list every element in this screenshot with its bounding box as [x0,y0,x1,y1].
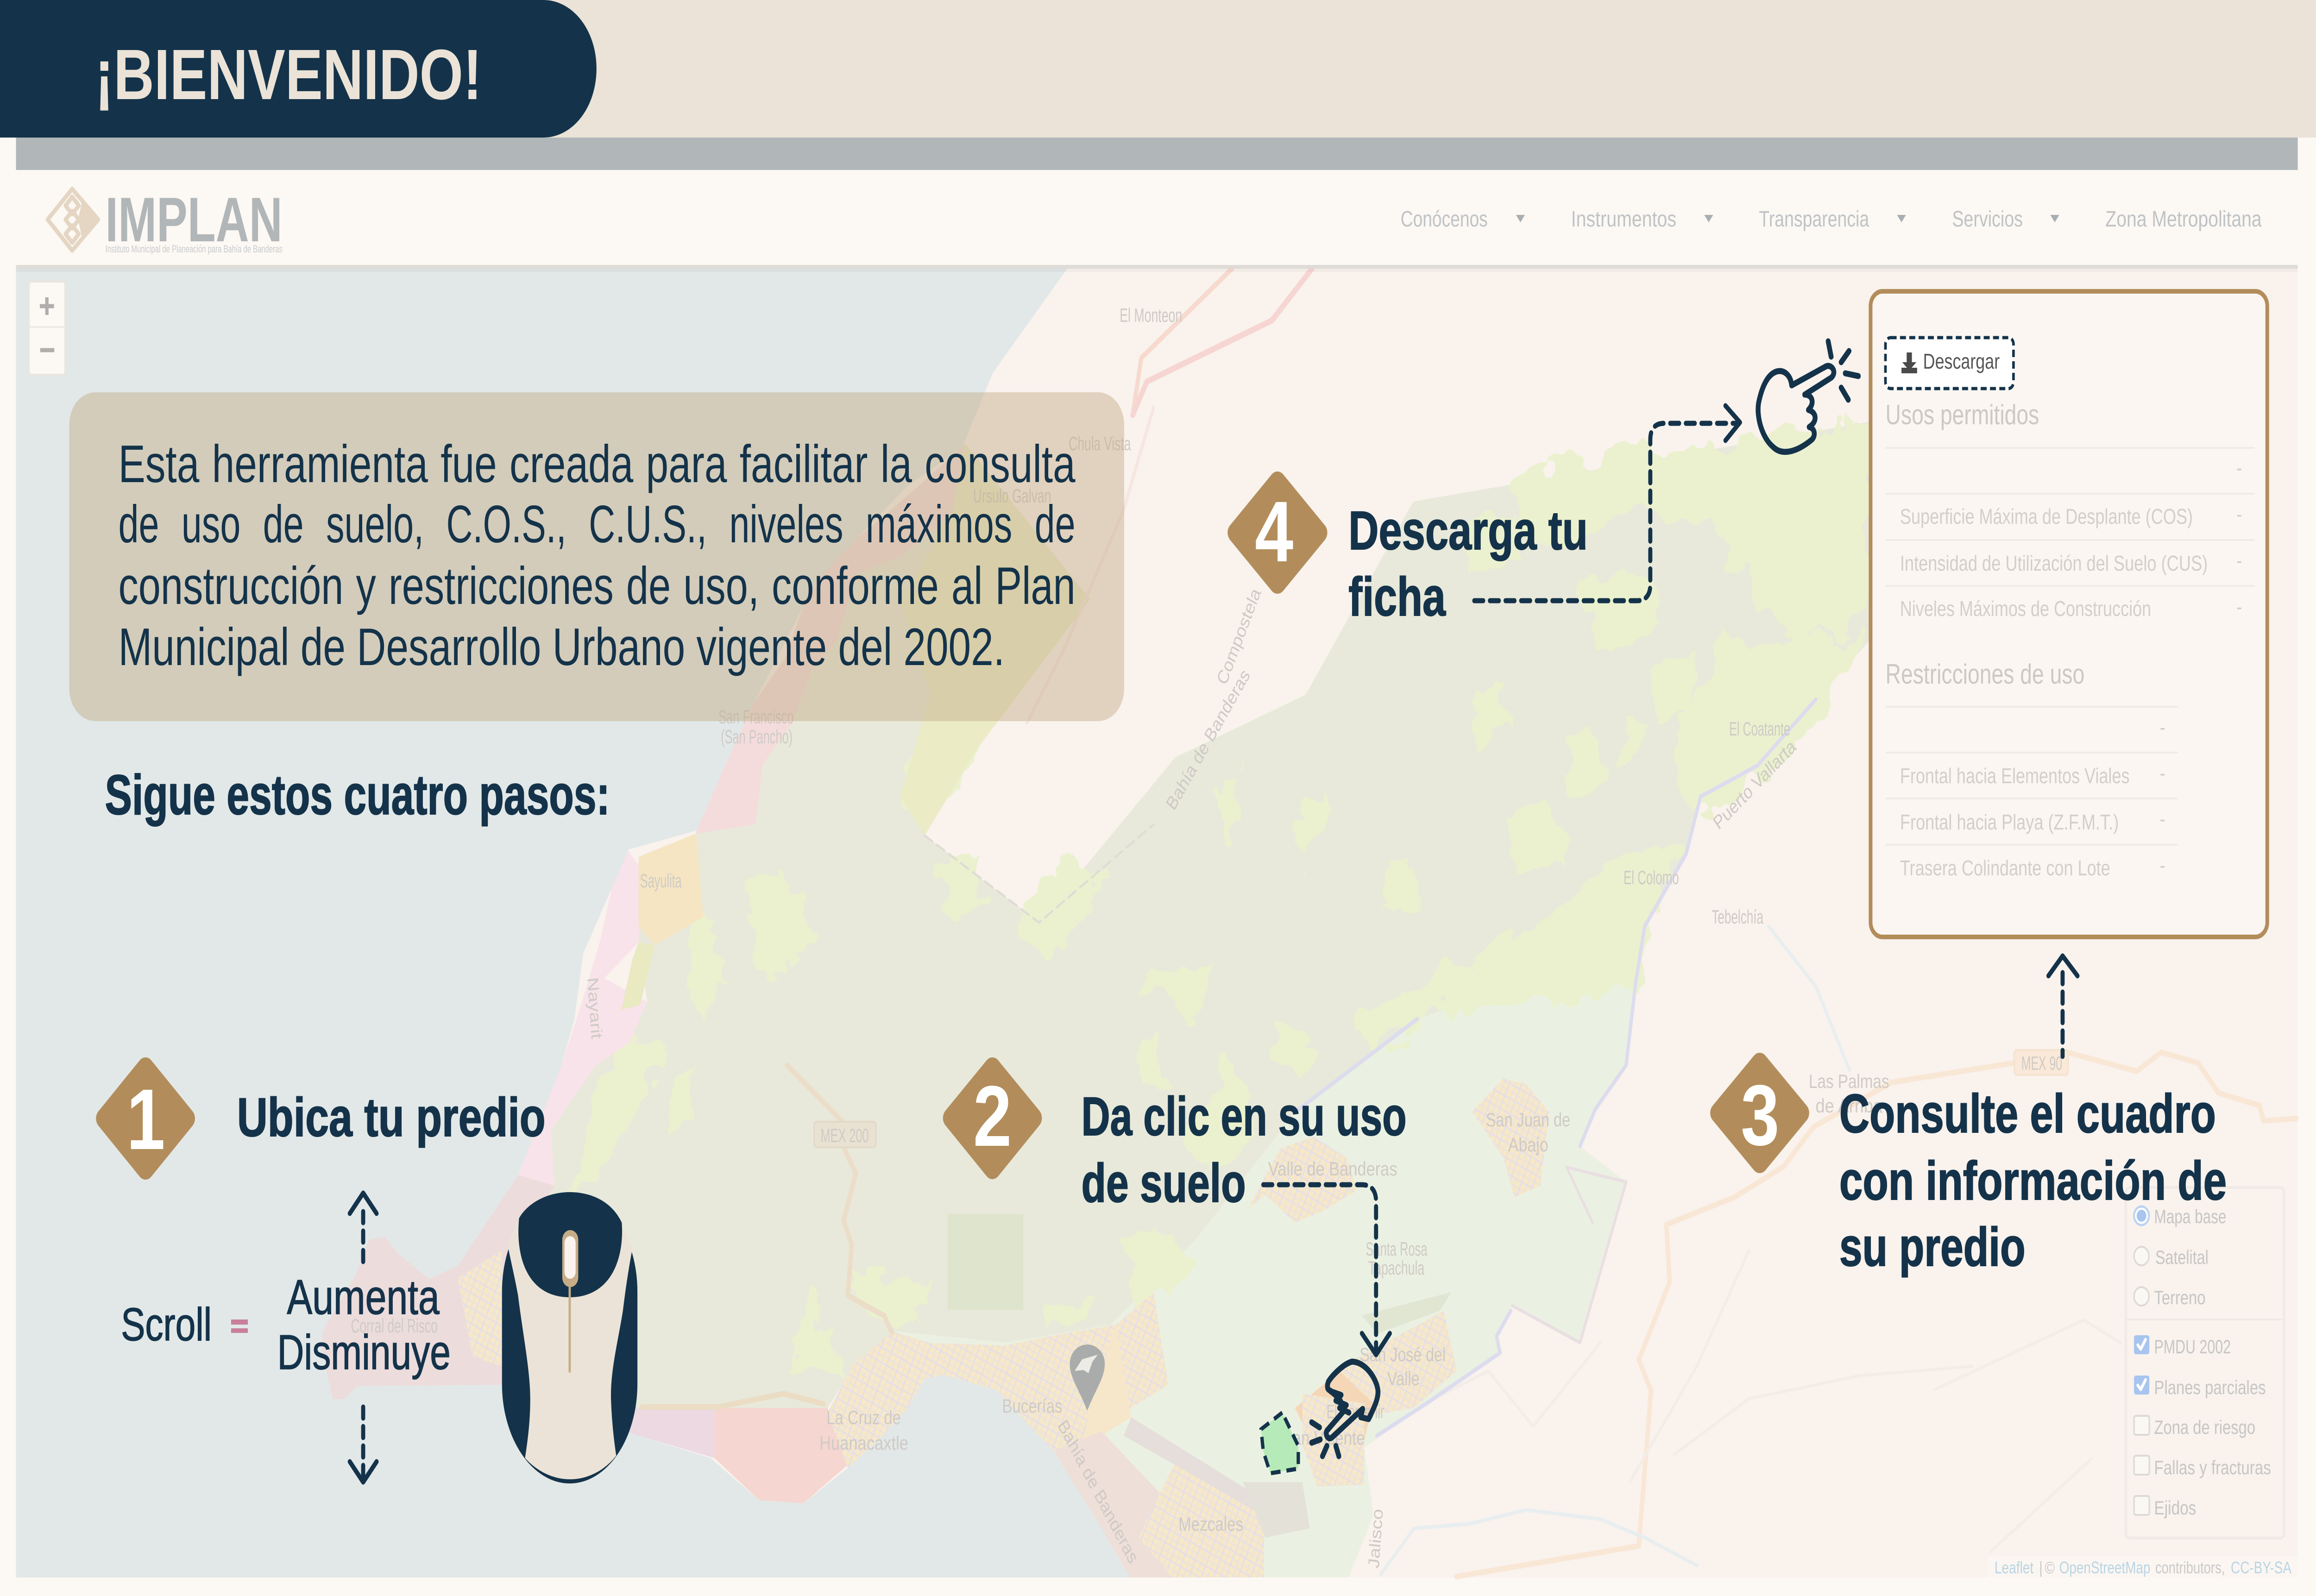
nav menu: Zona Metropolitana [2105,207,2262,232]
layer control: Planes parciales [2154,1377,2266,1399]
step 3 heading: Consulte el cuadro [1839,1083,2216,1144]
step 2 heading [1082,1086,1407,1213]
nav menu [1401,207,2262,232]
intro text: Municipal de Desarrollo Urbano vigente del 2002. [118,617,1005,676]
uses section: Niveles Máximos de Construcción [1900,597,2151,621]
step 3 heading: con información de [1839,1150,2227,1211]
step 3 arrow [2048,956,2077,1056]
towns [1248,1137,1357,1223]
title: ¡BIENVENIDO! [95,35,482,114]
zoom control [29,281,65,375]
water [16,269,1130,1577]
layer control [2126,1188,2284,1538]
step 1 badge [104,1068,187,1169]
map place labels: Chula Vista [1069,434,1131,455]
step 4 arrow [1474,406,1740,601]
arrow up [350,1193,377,1269]
map place labels: La Cruz de [826,1407,901,1429]
map place labels: Valle de Banderas [1268,1159,1397,1180]
map place labels: Ursulo Galvan [973,486,1051,507]
layer control: PMDU 2002 [2154,1337,2231,1358]
pale rectangle parcel [947,1214,1023,1310]
restrictions section: Frontal hacia Elementos Viales [1900,764,2130,788]
attribution: CC-BY-SA [2231,1558,2291,1577]
road sign MEX 90 [2014,1050,2068,1075]
gray band [16,138,2298,170]
map place labels: Compostela [1214,584,1265,688]
map place labels: (San Pancho) [721,727,793,748]
road sign MEX 200 [814,1122,876,1147]
uses section: Superficie Máxima de Desplante (COS) [1900,504,2193,528]
restrictions section: - [2160,853,2165,877]
step 1 heading: Ubica tu predio [237,1087,546,1148]
layer control: Ejidos [2154,1498,2196,1519]
map place labels: Nayarit [584,977,605,1040]
map place labels: Tapachula [1368,1258,1425,1279]
south urban strip [714,1408,848,1503]
step 4 badge [1236,482,1319,584]
step 2 heading: Da clic en su uso [1082,1086,1407,1147]
step 2 badge: 2 [973,1068,1012,1164]
map place labels: Corral del Risco [351,1316,438,1337]
restrictions section: - [2160,761,2165,785]
download button: Descargar [1923,349,2000,373]
step 2 [951,1068,1407,1473]
map place labels: San Juan de [1486,1110,1570,1131]
top banner [0,0,2316,138]
uses section [1886,399,2254,621]
logo: IMPLAN [105,185,283,255]
map place labels: El Colomo [1624,867,1679,889]
subheading: Sigue estos cuatro pasos: [105,764,610,826]
uses section: - [2236,502,2242,526]
restrictions section: Frontal hacia Playa (Z.F.M.T.) [1900,810,2119,834]
map place labels: Mezcales [1178,1514,1243,1535]
step 1 badge: 1 [126,1071,165,1168]
map place labels: San Francisco [718,707,794,728]
step 4 heading: Descarga tu [1348,500,1588,561]
restrictions section: - [2160,715,2165,739]
download button [1886,338,2014,389]
map place labels: Huanacaxtle [819,1433,908,1454]
step 4 [1236,341,1858,627]
step 2 badge [951,1068,1034,1169]
intro text box [69,392,1124,721]
attribution: © [2045,1558,2055,1577]
restrictions section: - [2160,807,2165,831]
restrictions section: Trasera Colindante con Lote [1900,856,2110,880]
intro text: Esta herramienta fue creada para facilitar la consulta [118,434,1076,493]
attribution: | [2039,1558,2043,1577]
step 3 badge [1718,1063,1801,1163]
map place labels: San José del [1359,1345,1446,1366]
map place labels: Las Palmas [1809,1071,1889,1093]
step 1 [104,1068,637,1483]
attribution: contributors, [2155,1558,2225,1577]
step 4 badge: 4 [1255,483,1293,580]
map place labels: Santa Rosa [1366,1239,1428,1260]
logo: Instituto Municipal de Planeación para Bahía de Banderas [105,244,283,255]
step 2 heading: de suelo [1082,1152,1246,1213]
step 4 heading: ficha [1348,566,1446,627]
upper coastal band under the text box [696,445,990,834]
restrictions section [1886,659,2178,880]
disminuye label: Disminuye [277,1325,451,1380]
road sign MEX 200: MEX 200 [820,1125,869,1147]
roads and rivers [642,269,2296,1577]
selected parcel [1261,1413,1298,1473]
nav menu: Instrumentos [1571,207,1676,232]
map place labels: Puerto Vallarta [1710,735,1800,834]
layer control: Fallas y fracturas [2154,1458,2271,1479]
info panel [1870,291,2267,937]
uses section: Usos permitidos [1886,399,2039,430]
road sign MEX 90: MEX 90 [2021,1053,2062,1074]
map place labels: Abajo [1508,1135,1548,1156]
map place labels: Sayulita [640,871,682,892]
map place labels: El Monteon [1120,305,1182,327]
layer control: Mapa base [2154,1206,2226,1228]
layer control: Terreno [2154,1288,2205,1309]
intro text [118,434,1076,676]
equals sign [231,1320,248,1333]
hand pointing icon [1758,341,1858,452]
nav menu: Conócenos [1401,207,1488,232]
map place labels: San Vicente [1282,1428,1365,1449]
title pill [0,0,597,138]
scroll label: Scroll [121,1299,212,1351]
layer control: Zona de riesgo [2154,1417,2255,1439]
uses section: - [2236,595,2242,619]
map place labels: El Coatante [1729,719,1790,740]
logo icon [48,189,98,251]
map place labels: Tebelchía [1712,907,1764,928]
parcial plan: coastal pink strip [518,847,647,1209]
arrow down [350,1407,377,1482]
uses section: - [2236,456,2242,480]
map place labels: de Arriba [1816,1096,1883,1117]
step 3 [1718,956,2227,1277]
step 4 heading [1348,500,1588,627]
layer control: Satelital [2155,1247,2209,1269]
attribution: Leaflet [1995,1558,2033,1577]
step 3 badge: 3 [1741,1067,1779,1163]
mouse icon [502,1192,637,1483]
hand click icon [1312,1362,1378,1456]
map place labels: El Porvenir [1327,1401,1385,1423]
attribution [1988,1556,2298,1577]
nav menu: Servicios [1952,207,2023,232]
navigation bar [16,170,2298,272]
intro text: de uso de suelo, C.O.S., C.U.S., niveles máximos de [118,494,1076,553]
map place labels: Bahía de Banderas [1054,1416,1141,1567]
map place labels [351,305,1889,1569]
map place labels: Bucerías [1002,1396,1063,1417]
intro text: construcción y restricciones de uso, conforme al Plan [118,556,1076,615]
map place labels: Bahía de Banderas [1163,666,1254,814]
attribution: OpenStreetMap [2059,1558,2151,1577]
uses section: - [2236,548,2242,572]
step 3 heading [1839,1083,2227,1277]
aumenta label: Aumenta [287,1270,440,1325]
map place labels: Jalisco [1366,1508,1387,1569]
uses section: Intensidad de Utilización del Suelo (CUS) [1900,551,2208,575]
map marker [1070,1345,1105,1411]
step 2 arrow [1263,1185,1390,1355]
nav menu: Transparencia [1759,207,1869,232]
map place labels: Valle [1387,1369,1420,1390]
step 3 heading: su predio [1839,1216,2026,1277]
restrictions section: Restricciones de uso [1886,659,2084,690]
